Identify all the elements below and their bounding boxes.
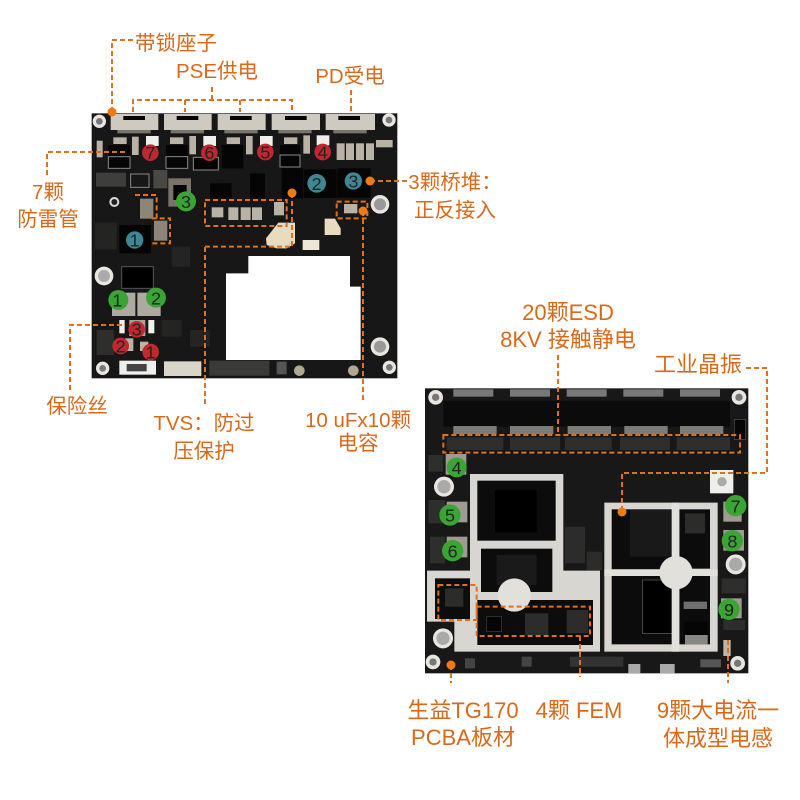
label: inductors	[657, 698, 779, 751]
shield frame right	[604, 503, 718, 652]
green badges: 9	[724, 600, 734, 620]
beige pads	[266, 219, 341, 250]
label: ESD: 20颗ESD	[522, 300, 614, 325]
RJ transformer row	[443, 389, 746, 439]
label: bridge rectifier: 3颗桥堆：	[408, 171, 502, 194]
board: PoE power PCB	[92, 113, 397, 378]
green badges: 6	[448, 541, 458, 561]
label: capacitors: 10 uFx10颗	[305, 409, 411, 432]
teal badges: 2	[312, 174, 322, 194]
green badges: 7	[731, 496, 741, 516]
teal badges	[126, 172, 362, 250]
label: TVS: TVS：防过	[153, 412, 255, 435]
green badges: 8	[727, 531, 737, 551]
dashed callouts on board	[135, 195, 367, 247]
green badges: 1	[112, 291, 122, 311]
label: lightning tube	[17, 181, 79, 231]
shield frame left	[427, 474, 600, 652]
shield compartments	[435, 481, 710, 645]
label: TVS: 压保护	[173, 440, 235, 463]
green badges: 2	[151, 288, 161, 308]
mounting holes	[93, 113, 396, 375]
board: core module PCB	[425, 388, 748, 673]
label: lightning tube: 7颗	[32, 181, 64, 204]
red badges: 5	[260, 142, 270, 162]
mounting holes	[426, 390, 746, 671]
heat shield cutout	[226, 256, 361, 360]
label: TVS	[153, 412, 255, 463]
red badges: 1	[146, 342, 156, 362]
red badges	[112, 142, 331, 362]
green badges: 4	[452, 458, 462, 478]
red badges: 3	[132, 320, 142, 340]
label: capacitors: 电容	[338, 432, 378, 455]
label: PD: PD受电	[315, 65, 385, 88]
label: fuse: 保险丝	[46, 395, 108, 418]
label: lightning tube: 防雷管	[17, 208, 79, 231]
label: PCB material: PCBA板材	[411, 725, 515, 750]
green badges: 3	[181, 192, 191, 212]
label: inductors: 9颗大电流一	[657, 698, 779, 723]
label: crystal: 工业晶振	[654, 352, 742, 377]
label: PSE: PSE供电	[176, 60, 258, 83]
label: inductors: 体成型电感	[663, 726, 773, 751]
chips	[445, 490, 708, 644]
green badges	[108, 191, 196, 311]
leader lines	[47, 40, 767, 683]
label: bridge rectifier: 正反接入	[414, 199, 496, 222]
red badges: 2	[116, 336, 126, 356]
shield circular cutouts	[498, 503, 718, 652]
label: FEM: 4颗 FEM	[536, 698, 622, 723]
ESD diode row	[447, 437, 730, 450]
power components	[95, 135, 393, 376]
red badges: 7	[145, 143, 155, 163]
label: PCB material	[407, 698, 519, 750]
teal badges: 1	[130, 230, 140, 250]
label: bridge rectifier	[408, 171, 502, 222]
inductors and SMD	[428, 454, 746, 673]
crystal oscillator	[710, 470, 733, 493]
teal badges: 3	[348, 172, 358, 192]
dashed callouts on board	[438, 435, 740, 636]
connectors row	[111, 114, 375, 133]
red badges: 6	[204, 143, 214, 163]
label: ESD	[500, 300, 636, 352]
red badges: 4	[318, 142, 328, 162]
label: PCB material: 生益TG170	[407, 698, 519, 723]
green badges	[439, 457, 746, 620]
label: ESD: 8KV 接触静电	[500, 327, 636, 352]
green badges: 5	[445, 506, 455, 526]
leader dots	[108, 108, 626, 670]
label: capacitors	[305, 409, 411, 455]
label: lock connector: 带锁座子	[135, 32, 217, 55]
